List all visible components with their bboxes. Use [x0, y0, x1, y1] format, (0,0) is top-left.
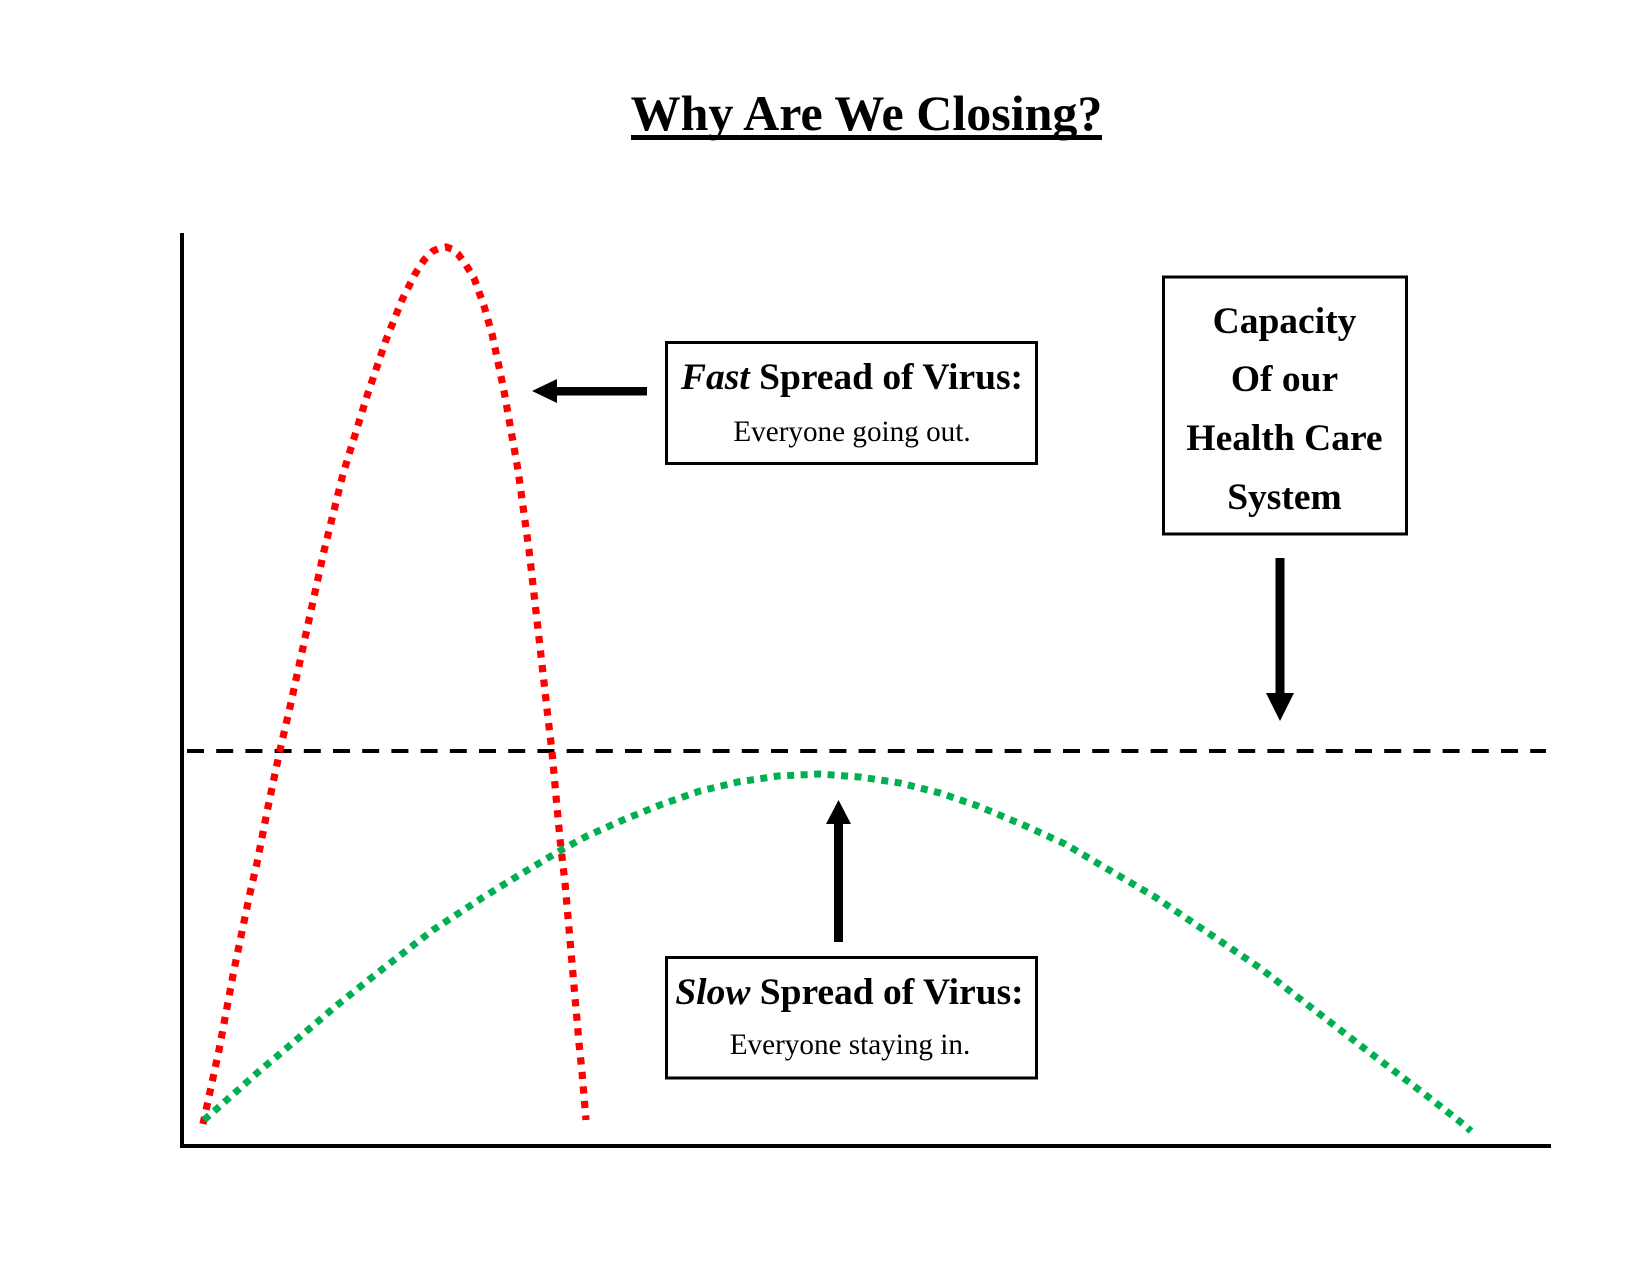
chart axes [182, 233, 1551, 1146]
callout: fast spread [666, 342, 1036, 464]
red curve: fast spread of virus [203, 247, 586, 1124]
capacity threshold dashed line [187, 749, 1546, 753]
arrow: pointing down to capacity line [1266, 558, 1294, 721]
text: system: System [1227, 477, 1342, 518]
text: health care: Health Care [1186, 418, 1383, 459]
arrow: pointing left to red curve [532, 379, 647, 403]
arrow: pointing up to green curve [826, 800, 851, 942]
title: Why Are We Closing? [631, 85, 1102, 141]
text: everyone staying in: Everyone staying in. [730, 1029, 970, 1061]
text: capacity: Capacity [1213, 301, 1357, 342]
callout: capacity of health care system [1164, 277, 1406, 534]
text: of our: Of our [1231, 359, 1338, 400]
callout: slow spread [666, 958, 1036, 1078]
heading: slow spread of virus: Slow Spread of Virus: [675, 972, 1024, 1013]
text: everyone going out: Everyone going out. [733, 416, 971, 448]
green curve: slow spread of virus [204, 774, 1471, 1131]
heading: fast spread of virus: Fast Spread of Virus: [680, 357, 1023, 398]
